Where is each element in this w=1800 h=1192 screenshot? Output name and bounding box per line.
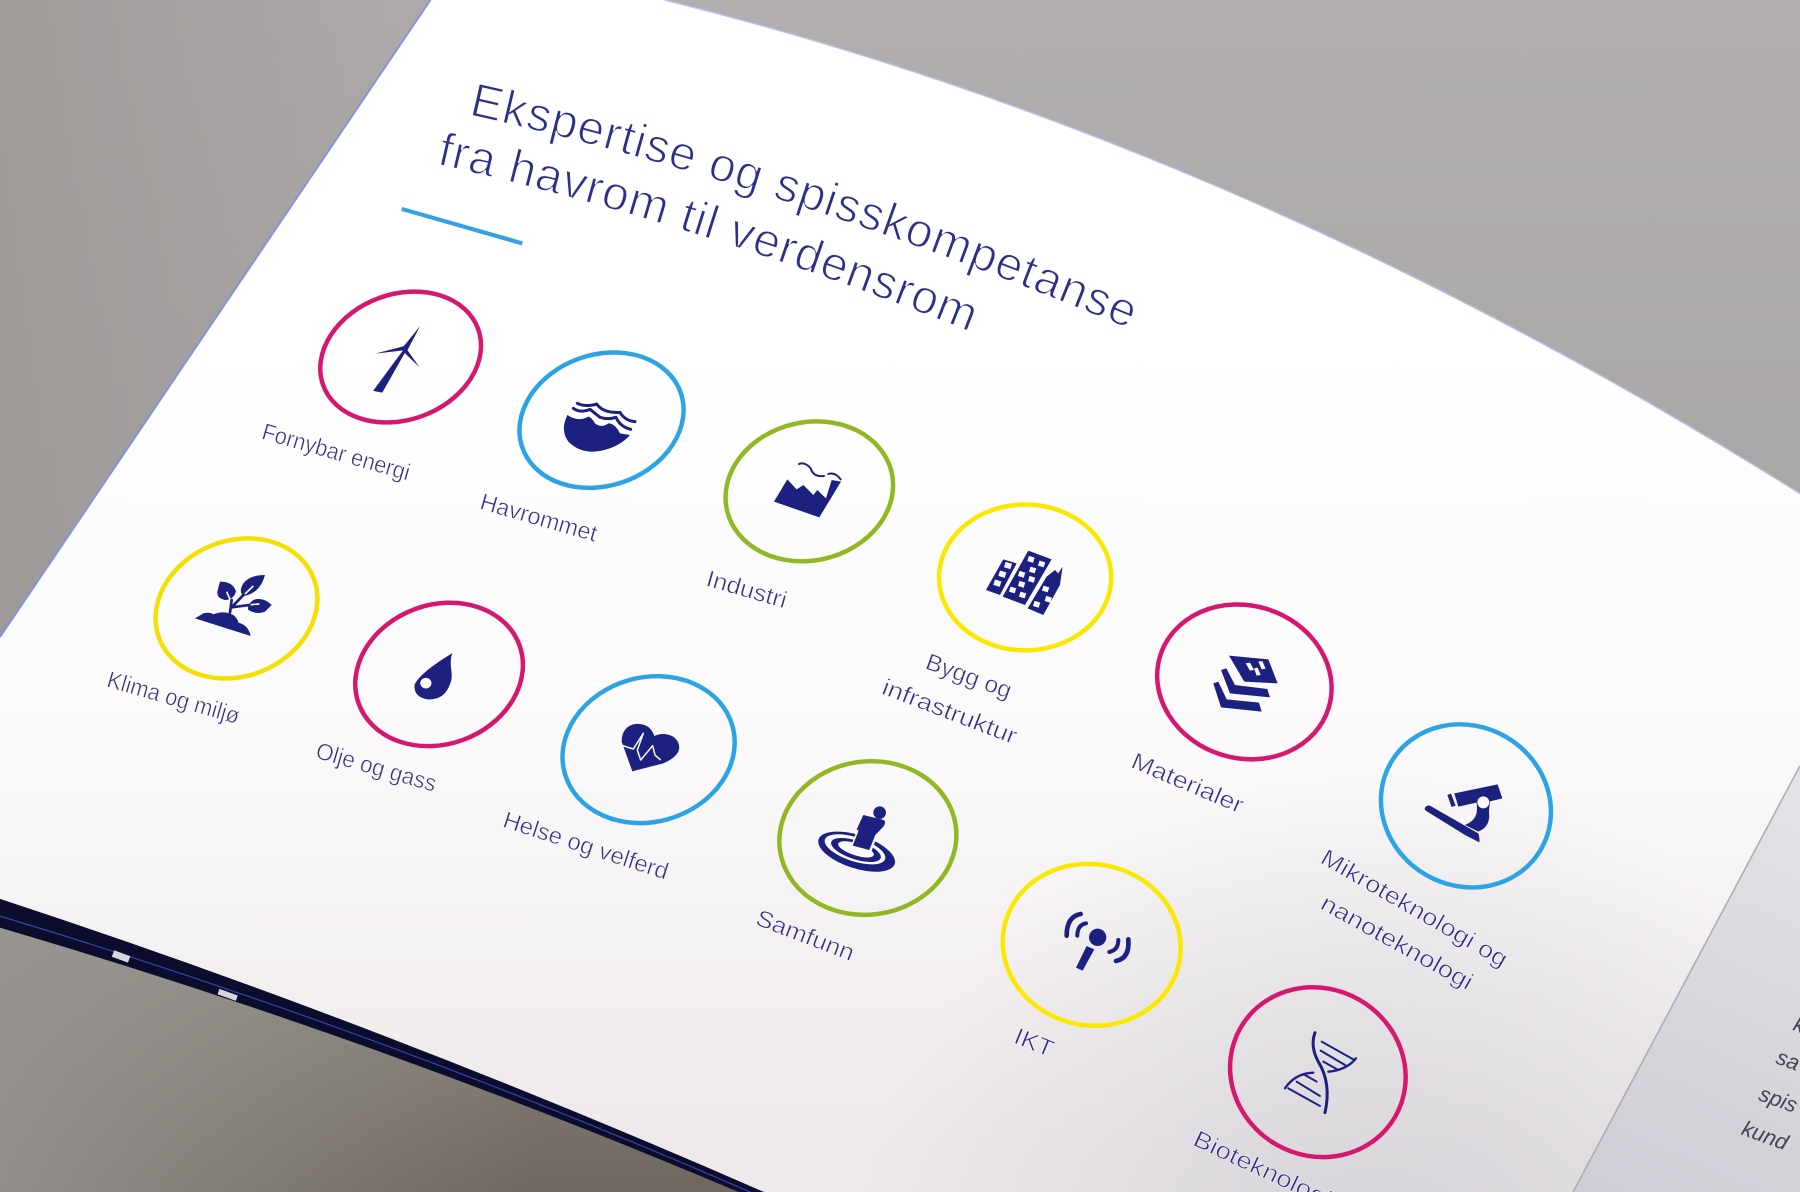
label: Olje og gass: [313, 737, 440, 797]
label: Helse og velferd: [500, 807, 672, 885]
ring: [939, 505, 1111, 650]
item: Materialer: [1128, 583, 1351, 818]
label: Samfunn: [752, 905, 858, 966]
ring: [545, 656, 752, 843]
item: Bygg og infrastruktur: [879, 505, 1111, 749]
ring: [1351, 693, 1581, 918]
icon: microscope: [1425, 784, 1502, 842]
ring: [335, 580, 543, 769]
icon: factory: [774, 463, 841, 517]
icon: wind turbine: [373, 326, 420, 393]
label: infrastruktur: [879, 674, 1021, 749]
title: Ekspertise og spisskompetanse: [472, 84, 1133, 325]
item: Industri: [703, 405, 907, 613]
navy cover edge below the page: [0, 895, 769, 1192]
next page with cropped text: spis: [1756, 1081, 1800, 1118]
label: Klima og miljø: [104, 666, 243, 729]
label: Havrommet: [477, 488, 601, 547]
icon: DNA helix: [1285, 1033, 1356, 1113]
item: Fornybar energi: [259, 270, 500, 485]
icon: person on target: [813, 806, 900, 880]
label: IKT: [1011, 1023, 1058, 1062]
item: Olje og gass: [313, 580, 543, 797]
next page with cropped text: kund: [1739, 1115, 1792, 1155]
item: Havrommet: [477, 331, 702, 547]
ring: [302, 270, 500, 444]
item: Helse og velferd: [500, 656, 752, 885]
label: [879, 648, 1021, 749]
item: Bioteknologi: [1189, 955, 1437, 1192]
icon: plant: [195, 575, 272, 636]
label: Bygg og: [922, 648, 1015, 703]
ring: [989, 849, 1195, 1041]
label: Fornybar energi: [259, 418, 413, 485]
next page with cropped text: [1570, 758, 1800, 1192]
label: Industri: [703, 565, 790, 613]
ring: [769, 750, 966, 926]
ring: [711, 405, 907, 578]
label: nanoteknologi: [1317, 890, 1478, 995]
item: Klima og miljø: [104, 515, 339, 729]
icon: oil drop: [414, 653, 452, 699]
label: Materialer: [1128, 748, 1248, 818]
title underline: [402, 209, 522, 243]
label: Mikroteknologi og: [1317, 844, 1512, 972]
ring: [134, 515, 339, 702]
ring: [1138, 583, 1351, 781]
label: [1317, 844, 1512, 995]
ring: [1199, 955, 1437, 1189]
ring: [501, 331, 702, 509]
item: Mikroteknologi og nanoteknologi: [1317, 693, 1581, 995]
item: IKT: [989, 849, 1195, 1062]
icon: buildings: [986, 551, 1063, 615]
icon: heart with pulse: [622, 724, 679, 771]
title: fra havrom til verdensrom: [441, 133, 974, 330]
icon: antenna signal: [1067, 914, 1128, 971]
icon: stacked layers: [1213, 656, 1278, 712]
icon: waves: [564, 403, 635, 452]
item: Samfunn: [752, 750, 966, 966]
